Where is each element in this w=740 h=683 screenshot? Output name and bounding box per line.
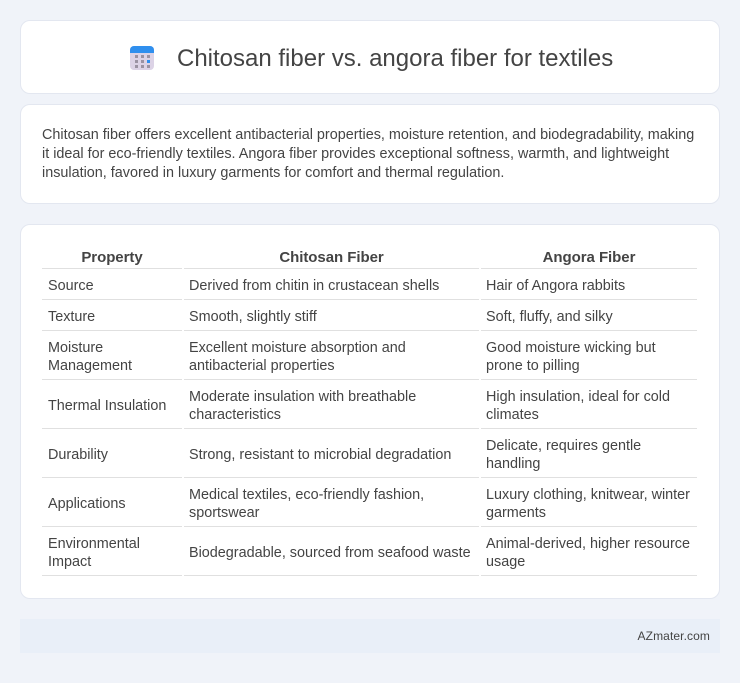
row: Moisture Management <box>48 340 656 374</box>
row: Environmental Impact: usage <box>486 554 525 570</box>
row: Texture <box>48 309 613 325</box>
table header: Property <box>42 248 182 269</box>
row: Thermal Insulation: High insulation, ideal for cold <box>486 389 670 405</box>
panel: comparison table card <box>20 224 720 599</box>
summary paragraph <box>42 127 694 181</box>
table header: Angora Fiber: Angora Fiber <box>543 249 635 266</box>
row: Source: Hair of Angora rabbits <box>486 278 625 294</box>
row: Thermal Insulation: Moderate insulation with breathable <box>189 389 416 405</box>
row: Applications: sportswear <box>189 505 259 521</box>
row: Texture: Smooth, slightly stiff <box>189 309 317 325</box>
row: Source <box>48 278 625 294</box>
title: Chitosan fiber vs. angora fiber for textiles <box>177 45 613 72</box>
row: Durability: Delicate, requires gentle <box>486 438 641 454</box>
row: Applications <box>48 487 690 521</box>
row: Thermal Insulation <box>48 389 670 423</box>
row: Applications: Medical textiles, eco-friendly fashion, <box>189 487 424 503</box>
table header: Chitosan Fiber: Chitosan Fiber <box>279 249 384 266</box>
icon: calendar <box>130 46 154 70</box>
table header: Property: Property <box>81 249 143 266</box>
footer credit: AZmater.com <box>638 629 710 643</box>
row: Durability: Strong, resistant to microbial degradation <box>189 447 451 463</box>
row: Applications: garments <box>486 505 546 521</box>
row: Environmental Impact: Biodegradable, sourced from seafood waste <box>189 545 471 561</box>
row: Moisture Management: Good moisture wicking but <box>486 340 656 356</box>
row: Texture: Soft, fluffy, and silky <box>486 309 613 325</box>
table header: Angora Fiber <box>481 248 697 269</box>
row: Thermal Insulation: Thermal Insulation <box>48 398 166 414</box>
row: Source: Derived from chitin in crustacean shells <box>189 278 439 294</box>
row: Moisture Management: Excellent moisture absorption and <box>189 340 406 356</box>
row: Environmental Impact <box>48 536 690 570</box>
row: Applications: Luxury clothing, knitwear, winter <box>486 487 690 503</box>
row: Moisture Management: Moisture <box>48 340 103 356</box>
row: Moisture Management: antibacterial properties <box>189 358 335 374</box>
row: Durability: Durability <box>48 447 108 463</box>
summary paragraph: it ideal for eco-friendly textiles. Angora fiber provides exceptional softness, warmth, and lightweight <box>42 146 669 162</box>
row: Durability <box>48 438 641 472</box>
panel: summary text <box>20 104 720 204</box>
summary paragraph: insulation, favored in luxury garments for comfort and thermal regulation. <box>42 165 504 181</box>
row: Environmental Impact: Environmental <box>48 536 140 552</box>
footer bar <box>20 619 720 653</box>
row: Thermal Insulation: characteristics <box>189 407 281 423</box>
row: Thermal Insulation: climates <box>486 407 539 423</box>
row: Durability: handling <box>486 456 540 472</box>
panel: title card <box>20 20 720 94</box>
row: Environmental Impact: Impact <box>48 554 91 570</box>
summary paragraph: Chitosan fiber offers excellent antibacterial properties, moisture retention, and biodegradability, making <box>42 127 694 143</box>
row: Source: Source <box>48 278 94 294</box>
row: Texture: Texture <box>48 309 95 325</box>
row: Moisture Management: prone to pilling <box>486 358 580 374</box>
row: Moisture Management: Management <box>48 358 132 374</box>
row: Environmental Impact: Animal-derived, higher resource <box>486 536 690 552</box>
table header: Chitosan Fiber <box>184 248 479 269</box>
row: Applications: Applications <box>48 496 126 512</box>
